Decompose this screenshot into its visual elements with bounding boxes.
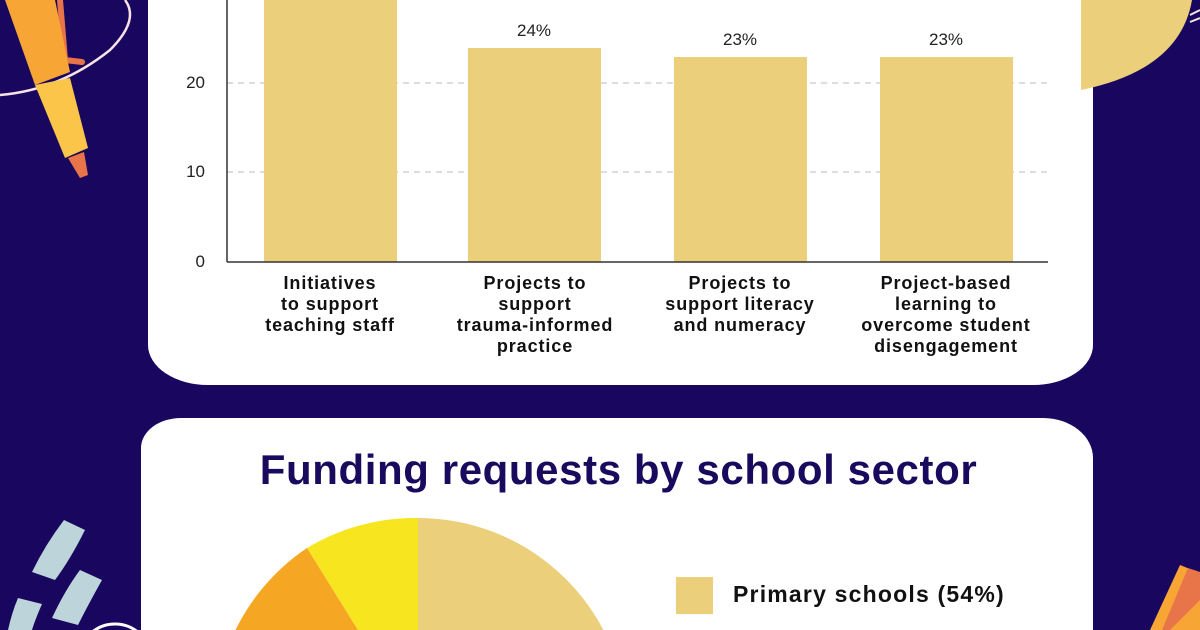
bar chart: overcome student <box>861 315 1031 335</box>
bar chart: Projects to <box>689 273 791 293</box>
bar chart: 20 <box>186 73 205 92</box>
bar chart: 10 <box>186 162 205 181</box>
bar chart: 23% <box>929 30 963 49</box>
bar chart: trauma-informed <box>457 315 613 335</box>
bar chart: disengagement <box>874 336 1018 356</box>
legend: Primary schools (54%) <box>733 581 1005 607</box>
bar chart: learning to <box>895 294 997 314</box>
bar chart: to support <box>281 294 379 314</box>
bar chart: 24% <box>517 21 551 40</box>
icon: pen <box>5 0 88 178</box>
icon: pencil <box>1150 565 1200 630</box>
bar chart: Projects to <box>484 273 586 293</box>
bar chart: support literacy <box>665 294 815 314</box>
pie chart <box>236 518 604 630</box>
bar chart: 0 <box>196 252 205 271</box>
bar chart: 23% <box>723 30 757 49</box>
bar chart <box>186 0 1048 356</box>
bar chart: Initiatives <box>284 273 376 293</box>
bar chart: Project-based <box>881 273 1011 293</box>
panel: bar chart card <box>148 0 1093 385</box>
heading: Funding requests by school sector <box>260 446 977 493</box>
panel: pie chart card <box>141 418 1093 630</box>
icon: beige blob <box>1081 0 1200 90</box>
icon: white circle <box>79 624 151 630</box>
icon: brush strokes <box>8 520 102 630</box>
bar chart: practice <box>497 336 573 356</box>
bar chart: support <box>498 294 572 314</box>
bar chart: teaching staff <box>265 315 395 335</box>
bar chart: and numeracy <box>674 315 806 335</box>
legend <box>676 577 1005 614</box>
icon: ring arc <box>0 0 130 95</box>
